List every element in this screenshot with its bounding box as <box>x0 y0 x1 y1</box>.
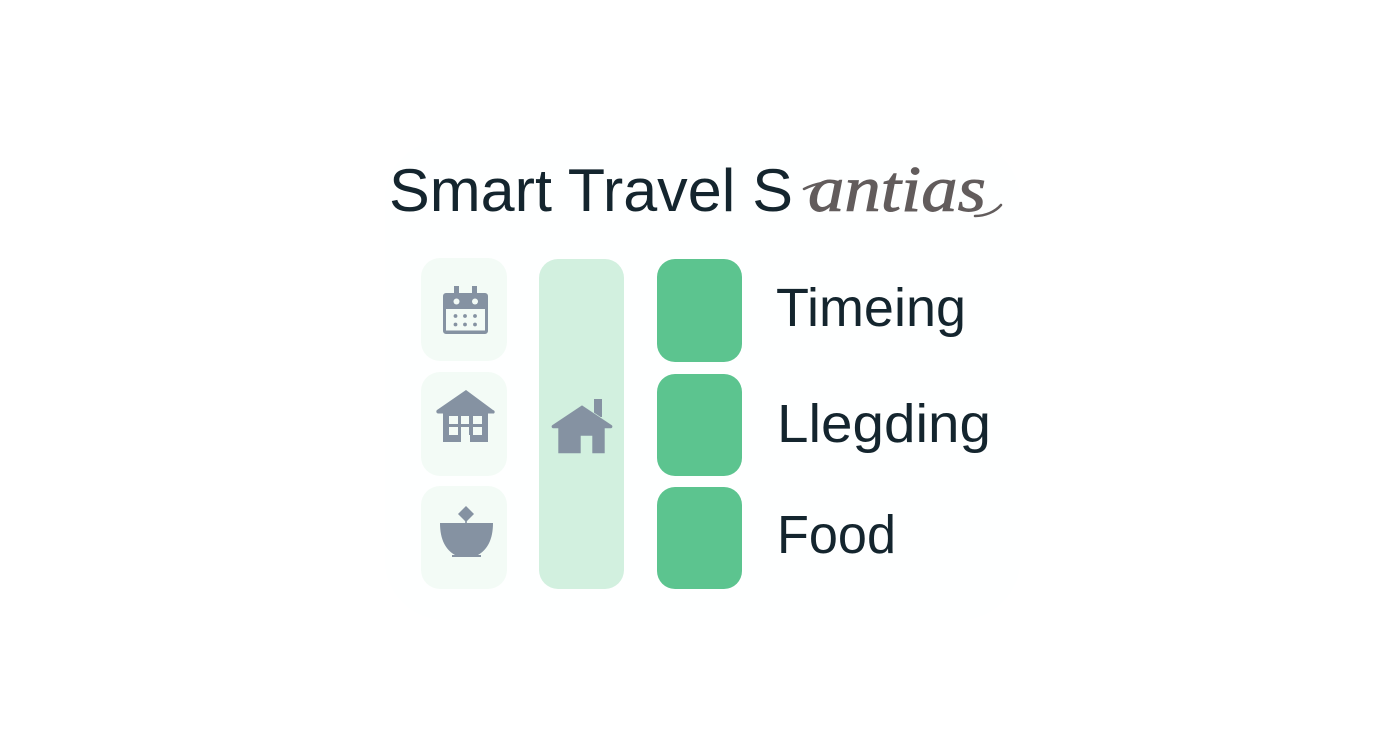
card: lodging <box>421 372 507 476</box>
icon: building <box>436 390 495 442</box>
icon: bowl <box>440 506 493 557</box>
title: antias <box>808 153 986 226</box>
title <box>389 153 1001 226</box>
label: Llegding: Llegding <box>777 394 991 454</box>
card: calendar <box>421 258 507 361</box>
title: Smart Travel S <box>389 157 793 224</box>
icon: house <box>551 399 613 454</box>
icon: calendar <box>443 286 488 334</box>
label: Timeing: Timeing <box>776 278 966 338</box>
card: food <box>421 486 507 589</box>
panel: green squares <box>657 259 742 589</box>
panel: lodging tall bar <box>539 259 624 589</box>
panel: icon column <box>421 258 507 589</box>
label: Food: Food <box>777 505 896 565</box>
